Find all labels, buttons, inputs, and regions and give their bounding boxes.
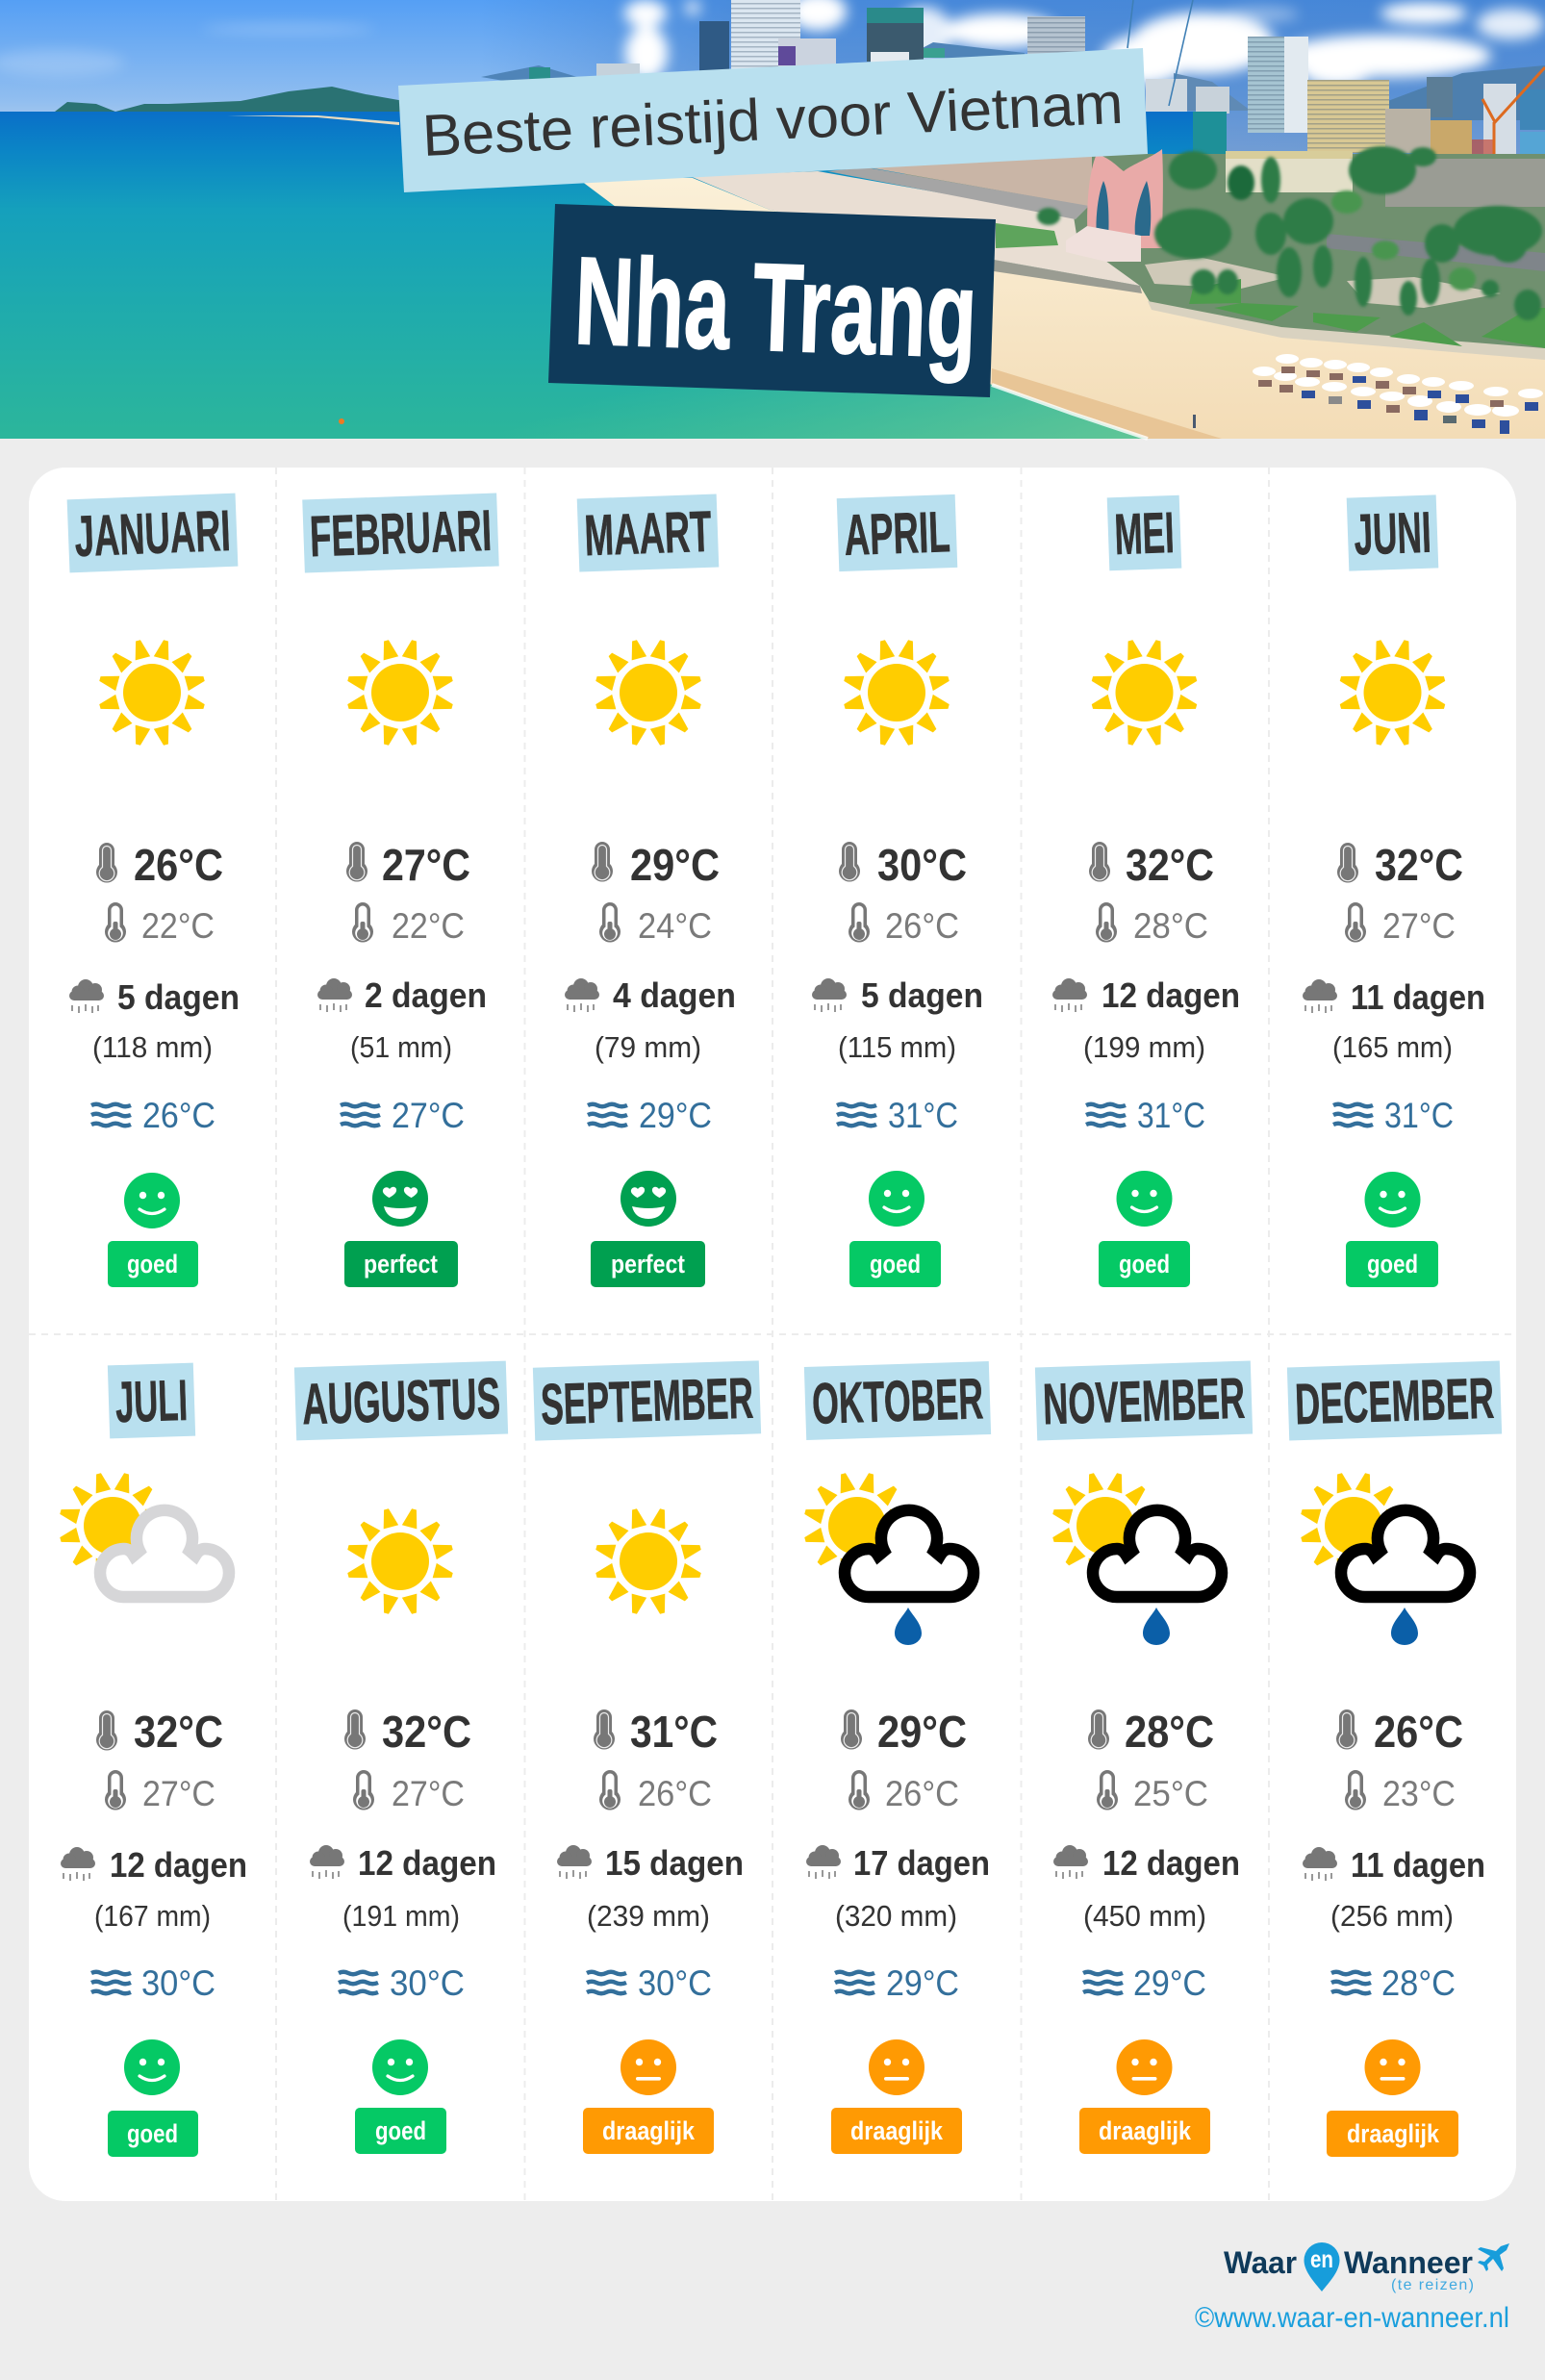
month: januari — [67, 494, 238, 572]
icon: sun — [98, 639, 206, 747]
rain days — [310, 1843, 496, 1883]
sea temperature: 29°C — [886, 1963, 959, 2003]
min temperature — [1345, 902, 1456, 946]
icon: sun — [1338, 639, 1447, 747]
rainfall: (115 mm) — [838, 1030, 956, 1064]
rainfall: (239 mm) — [587, 1899, 710, 1933]
rain days — [317, 975, 487, 1015]
rainfall: (450 mm) — [1083, 1899, 1206, 1933]
month: februari: FEBRUARI — [309, 498, 493, 569]
panel: september — [533, 1360, 761, 2154]
smiley — [621, 2039, 676, 2095]
rain days: 12 dagen — [358, 1843, 496, 1883]
max temperature — [1089, 840, 1214, 890]
panel: februari — [302, 493, 499, 1287]
min temperature: 23°C — [1382, 1774, 1456, 1813]
panel: maart — [565, 494, 736, 1287]
sea temperature: 30°C — [390, 1963, 465, 2003]
min temperature — [105, 1770, 215, 1813]
min temperature: 22°C — [392, 906, 465, 946]
min temperature: 26°C — [638, 1774, 712, 1813]
rain days — [1053, 1843, 1240, 1883]
panel: month card — [29, 468, 1516, 2201]
website credit: ©www.waar-en-wanneer.nl — [1195, 2302, 1509, 2334]
month: februari — [302, 493, 499, 573]
rain days: 12 dagen — [1102, 975, 1240, 1015]
sea — [0, 112, 1193, 439]
rating badge: goed — [870, 1250, 921, 1279]
rainfall: (320 mm) — [835, 1899, 957, 1933]
max temperature — [1336, 1707, 1463, 1757]
sea temperature — [1086, 1096, 1205, 1135]
max temperature — [346, 840, 470, 890]
min temperature: 27°C — [142, 1774, 215, 1813]
smiley — [621, 1171, 676, 1227]
max temperature — [96, 1707, 223, 1757]
title banner: Beste reistijd voor Vietnam: Beste reistijd voor Vietnam — [420, 70, 1125, 168]
panel: december — [1287, 1361, 1502, 2157]
rain days — [1052, 975, 1240, 1015]
city skyline — [529, 0, 1545, 183]
icon: sun behind grey cloud — [59, 1472, 229, 1597]
max temperature: 32°C — [134, 1707, 223, 1757]
sea temperature — [91, 1963, 215, 2003]
rain days: 17 dagen — [853, 1843, 990, 1883]
rating badge — [1327, 2111, 1458, 2157]
icon: sun — [843, 639, 950, 747]
sea temperature — [91, 1096, 215, 1135]
panel: april — [812, 494, 983, 1287]
icon: sun — [595, 1507, 702, 1615]
max temperature: 32°C — [382, 1707, 471, 1757]
month: oktober: OKTOBER — [811, 1366, 984, 1436]
rain days: 11 dagen — [1351, 977, 1485, 1017]
min temperature: 26°C — [885, 1774, 959, 1813]
sea temperature — [1331, 1963, 1456, 2003]
logo: Waar en Wanneer: (te reizen) — [1391, 2277, 1474, 2293]
rating badge: draaglijk — [602, 2116, 696, 2145]
month: april: APRIL — [843, 499, 951, 568]
rainfall: (191 mm) — [342, 1899, 460, 1933]
min temperature: 28°C — [1133, 906, 1208, 946]
month: maart: MAART — [583, 499, 713, 568]
month: augustus: AUGUSTUS — [301, 1366, 501, 1436]
min temperature — [848, 902, 959, 946]
min temperature: 22°C — [141, 906, 215, 946]
rating badge: draaglijk — [1347, 2119, 1440, 2148]
month: juli: JULI — [114, 1368, 189, 1434]
logo: Waar en Wanneer: en — [1310, 2246, 1333, 2273]
rain days — [61, 1845, 247, 1885]
rating badge — [849, 1241, 941, 1287]
max temperature — [1337, 840, 1463, 890]
rating badge — [1099, 1241, 1190, 1287]
max temperature: 26°C — [1374, 1707, 1463, 1757]
max temperature: 29°C — [877, 1707, 967, 1757]
min temperature — [1345, 1770, 1456, 1813]
max temperature — [96, 840, 223, 890]
sea temperature — [588, 1096, 712, 1135]
icon: sun, black cloud and rain drop — [1300, 1472, 1470, 1645]
rainfall: (118 mm) — [92, 1030, 213, 1064]
rain days — [812, 975, 983, 1015]
rating badge: perfect — [364, 1250, 438, 1279]
sea temperature — [587, 1963, 712, 2003]
sea temperature — [1083, 1963, 1206, 2003]
max temperature — [841, 1707, 967, 1757]
max temperature: 29°C — [630, 840, 720, 890]
month: juni — [1347, 494, 1438, 571]
rainfall: (51 mm) — [350, 1030, 452, 1064]
month: maart — [577, 494, 719, 572]
rating badge: goed — [127, 1250, 178, 1279]
rating badge: goed — [127, 2119, 178, 2148]
month: mei — [1107, 495, 1181, 570]
rain days: 12 dagen — [110, 1845, 247, 1885]
rating badge: goed — [1367, 1250, 1418, 1279]
month: november — [1035, 1361, 1253, 1440]
rainfall: (79 mm) — [595, 1030, 701, 1064]
rating badge: draaglijk — [850, 2116, 944, 2145]
sea temperature: 27°C — [392, 1096, 465, 1135]
rating badge — [591, 1241, 705, 1287]
max temperature: 27°C — [382, 840, 470, 890]
month: november: NOVEMBER — [1042, 1366, 1246, 1436]
smiley — [1116, 1171, 1172, 1227]
panel: november — [1035, 1361, 1253, 2154]
sea temperature: 30°C — [141, 1963, 215, 2003]
max temperature: 30°C — [877, 840, 967, 890]
smiley — [869, 2039, 924, 2095]
rainfall: (256 mm) — [1330, 1899, 1454, 1933]
sea temperature — [339, 1963, 465, 2003]
max temperature: 31°C — [630, 1707, 718, 1757]
hero photo: Nha Trang beach — [0, 0, 1545, 439]
sea temperature: 31°C — [1384, 1096, 1454, 1135]
icon: sun — [1090, 639, 1199, 747]
smiley — [1364, 1172, 1420, 1228]
min temperature — [599, 1770, 712, 1813]
month: juli — [108, 1363, 195, 1438]
max temperature: 28°C — [1125, 1707, 1214, 1757]
month: september — [533, 1360, 761, 1441]
month: april — [837, 494, 957, 571]
rating badge: goed — [1119, 1250, 1170, 1279]
icon: sun — [346, 1507, 454, 1615]
month: januari: JANUARI — [73, 498, 232, 569]
rain days — [806, 1843, 990, 1883]
min temperature — [848, 1770, 959, 1813]
month: augustus — [294, 1361, 508, 1440]
min temperature — [105, 902, 215, 946]
min temperature: 27°C — [392, 1774, 465, 1813]
icon: sun — [595, 639, 702, 747]
month: september: SEPTEMBER — [540, 1366, 754, 1436]
panel: juni — [1303, 494, 1485, 1287]
rating badge — [355, 2108, 446, 2154]
rating badge — [1346, 1241, 1438, 1287]
sea temperature: 26°C — [142, 1096, 215, 1135]
title banner: Beste reistijd voor Vietnam — [398, 48, 1148, 192]
sea temperature: 31°C — [888, 1096, 958, 1135]
rain days — [1303, 977, 1485, 1017]
month: oktober — [804, 1361, 991, 1440]
max temperature — [592, 840, 720, 890]
panel: oktober — [803, 1361, 991, 2154]
rating badge — [583, 2108, 714, 2154]
rating badge — [1079, 2108, 1210, 2154]
rain days: 12 dagen — [1102, 1843, 1240, 1883]
logo: Waar en Wanneer: Waar — [1224, 2245, 1297, 2280]
logo: Waar en Wanneer — [1224, 2242, 1509, 2293]
rainfall: (167 mm) — [94, 1899, 211, 1933]
sea temperature: 29°C — [639, 1096, 712, 1135]
panel: januari — [67, 494, 240, 1287]
smiley — [372, 1171, 428, 1227]
rain days: 11 dagen — [1351, 1845, 1485, 1885]
max temperature: 26°C — [134, 840, 223, 890]
month: juni: JUNI — [1353, 500, 1432, 567]
rainfall: (199 mm) — [1083, 1030, 1205, 1064]
rain days — [557, 1843, 744, 1883]
min temperature: 24°C — [638, 906, 712, 946]
rain days — [1303, 1845, 1485, 1885]
rating badge: draaglijk — [1099, 2116, 1192, 2145]
icon: sun, black cloud and rain drop — [803, 1472, 974, 1645]
min temperature — [353, 1770, 465, 1813]
rain days: 5 dagen — [861, 975, 983, 1015]
sea temperature — [1333, 1096, 1454, 1135]
min temperature — [599, 902, 712, 946]
rating badge: goed — [375, 2116, 426, 2145]
sea temperature: 28°C — [1381, 1963, 1456, 2003]
rain days: 15 dagen — [605, 1843, 744, 1883]
title banner: Nha Trang — [548, 204, 996, 397]
rating badge: perfect — [611, 1250, 685, 1279]
rain days: 2 dagen — [365, 975, 487, 1015]
min temperature — [1096, 902, 1208, 946]
max temperature — [839, 840, 967, 890]
smiley — [869, 1171, 924, 1227]
min temperature: 27°C — [1382, 906, 1456, 946]
smiley — [1116, 2039, 1172, 2095]
smiley — [124, 1173, 180, 1228]
rain days: 4 dagen — [613, 975, 736, 1015]
min temperature: 25°C — [1133, 1774, 1208, 1813]
rating badge — [344, 1241, 458, 1287]
title banner: Nha Trang: Nha Trang — [572, 230, 979, 385]
min temperature: 26°C — [885, 906, 959, 946]
sea temperature: 31°C — [1137, 1096, 1205, 1135]
max temperature — [1088, 1707, 1214, 1757]
smiley — [1364, 2039, 1420, 2095]
rating badge — [108, 2111, 198, 2157]
icon: sun — [346, 639, 454, 747]
rating badge — [108, 1241, 198, 1287]
max temperature: 32°C — [1375, 840, 1463, 890]
month: mei: MEI — [1113, 500, 1176, 567]
smiley — [372, 2039, 428, 2095]
smiley — [124, 2039, 180, 2095]
panel: augustus — [294, 1361, 508, 2154]
rainfall: (165 mm) — [1332, 1030, 1453, 1064]
max temperature — [594, 1707, 718, 1757]
max temperature: 32°C — [1126, 840, 1214, 890]
min temperature — [352, 902, 465, 946]
rain days — [565, 975, 736, 1015]
sea temperature: 29°C — [1133, 1963, 1206, 2003]
panel: mei — [1052, 495, 1240, 1287]
max temperature — [344, 1707, 471, 1757]
logo: Waar en Wanneer: Wanneer — [1344, 2245, 1473, 2280]
rating badge — [831, 2108, 962, 2154]
rain days — [69, 977, 240, 1017]
icon: sun, black cloud and rain drop — [1051, 1472, 1222, 1645]
sea temperature — [835, 1963, 959, 2003]
sea temperature: 30°C — [638, 1963, 712, 2003]
land — [866, 154, 1545, 356]
sea temperature — [341, 1096, 465, 1135]
sea temperature — [837, 1096, 958, 1135]
rain days: 5 dagen — [117, 977, 240, 1017]
min temperature — [1097, 1770, 1208, 1813]
panel: juli — [59, 1363, 247, 2157]
